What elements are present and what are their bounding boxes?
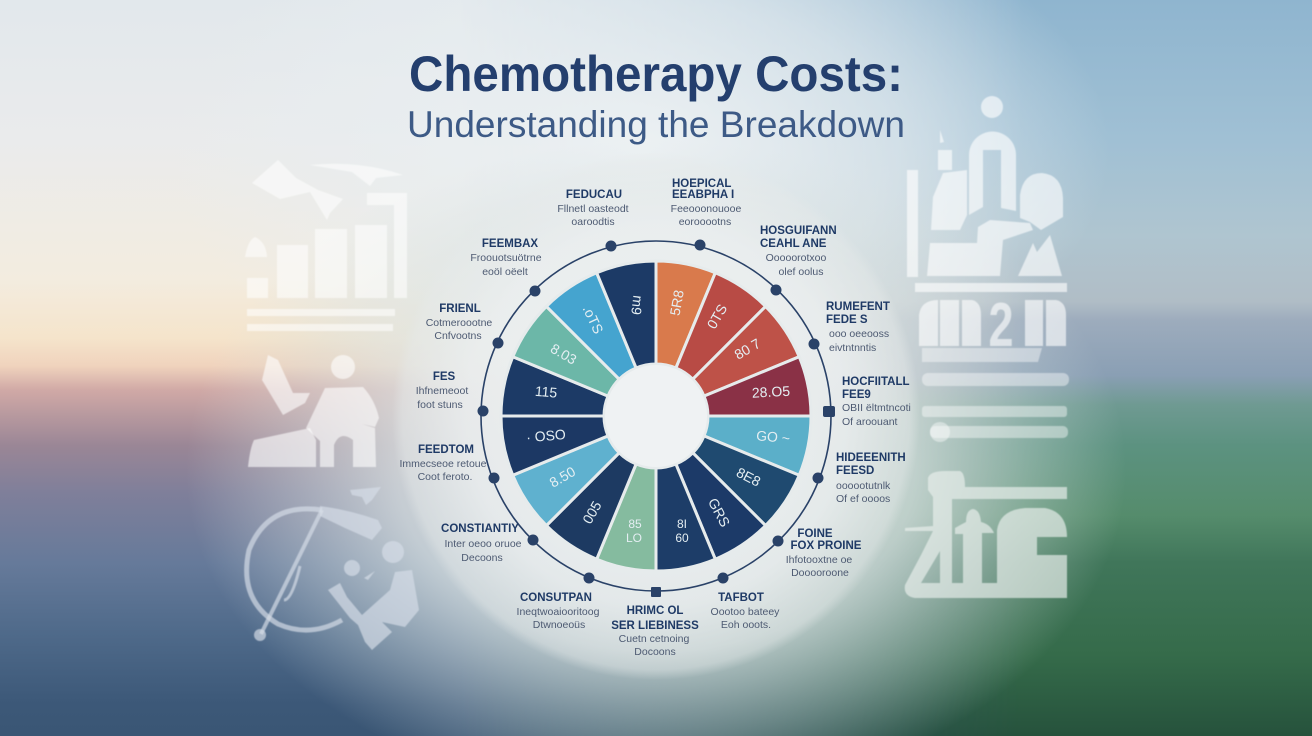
outer ring — [481, 241, 831, 591]
chart: cost wheel — [478, 240, 835, 597]
labels around the wheel — [400, 178, 911, 658]
label HOSGUIFANN: Ooooorotxoo — [766, 252, 827, 264]
segment 2 red — [676, 273, 766, 379]
label RUMEFENT: ooo oeeooss — [829, 328, 889, 340]
label HRIMC OL: Docoons — [634, 646, 676, 658]
label HIDEEENITH: HIDEEENITH — [836, 452, 906, 464]
label TAFBOT: Eoh ooots. — [721, 619, 771, 631]
label RUMEFENT: eivtntnntis — [829, 342, 876, 354]
value navy 115: 115 — [534, 383, 558, 401]
label HRIMC OL: HRIMC OL — [627, 605, 683, 617]
label CONSUTPAN — [517, 592, 600, 631]
label FRIENL: Cnfvootns — [434, 330, 482, 342]
label FRIENL — [426, 303, 492, 342]
label HOEPICAL — [671, 178, 741, 228]
icon: tiles with numeral: 2 — [988, 291, 1014, 360]
value navy 050: · OSO — [525, 426, 566, 445]
value deep blue: 8E8 — [734, 464, 764, 490]
label HOSGUIFANN — [760, 225, 837, 278]
label CONSTIANTIY: CONSTIANTIY — [441, 523, 519, 535]
label FOINE: FOINE — [797, 528, 833, 540]
label TAFBOT — [711, 592, 780, 631]
label FEEMBAX: FEEMBAX — [482, 238, 538, 250]
label FEEDTOM: FEEDTOM — [418, 444, 474, 456]
label CONSTIANTIY: Decoons — [461, 552, 503, 564]
label FES: FES — [433, 371, 456, 383]
label HIDEEENITH: Of ef oooos — [836, 493, 890, 505]
icon: flask and equipment — [905, 471, 1067, 598]
label HOCFIITALL: OBII ëltmtncoti — [842, 402, 911, 414]
label CONSUTPAN: Ineqtwoaiooritoog — [517, 606, 600, 618]
label HOEPICAL: eorooootns — [679, 216, 731, 228]
icon: hospital figures — [907, 96, 1067, 292]
icon group: right column silhouettes — [905, 96, 1069, 598]
segment 5 light blue — [704, 416, 811, 475]
value navy 005: 005 — [579, 498, 605, 526]
value green lower: LO — [626, 531, 642, 545]
label FEEDTOM — [400, 444, 487, 483]
label TAFBOT: TAFBOT — [718, 592, 764, 604]
label HIDEEENITH: oooootutnlk — [836, 480, 891, 492]
label HRIMC OL: Cuetn cetnoing — [619, 633, 689, 645]
label FOINE: FOX PROINE — [791, 540, 862, 552]
value teal: 8.03 — [548, 340, 580, 368]
label HOSGUIFANN: HOSGUIFANN — [760, 225, 837, 237]
label HRIMC OL — [611, 605, 699, 658]
label FRIENL: FRIENL — [439, 303, 481, 315]
segments — [501, 261, 811, 571]
value dark red: 28.O5 — [751, 383, 791, 401]
label HIDEEENITH — [836, 452, 906, 505]
label HRIMC OL: SER LIEBINESS — [611, 620, 699, 632]
label FOINE — [786, 528, 862, 579]
heading line 2: Understanding the Breakdown — [407, 104, 905, 145]
label FEDUCAU — [557, 189, 629, 228]
label CONSTIANTIY: Inter oeoo oruoe — [444, 538, 522, 550]
label FEDUCAU: Fllnetl oasteodt — [557, 203, 629, 215]
label FEEMBAX: eoöl oëelt — [482, 266, 528, 278]
centre hub — [605, 365, 707, 467]
label FEEMBAX: Froouotsuötrne — [470, 252, 542, 264]
label CONSUTPAN: Dtwnoeoüs — [533, 619, 585, 631]
label RUMEFENT: RUMEFENT — [826, 301, 890, 313]
label FEEDTOM: Immecseoe retoue — [400, 458, 487, 470]
icon: bar chart with mountain — [245, 160, 407, 331]
label TAFBOT: Oootoo bateey — [711, 606, 780, 618]
segment 16 navy — [597, 261, 656, 368]
label FEDUCAU: oaroodtis — [571, 216, 615, 228]
icon: circular tool with figure — [247, 487, 419, 650]
label HOEPICAL: EEABPHA I — [672, 189, 734, 201]
label RUMEFENT: FEDE S — [826, 314, 868, 326]
segment 6 deep blue — [693, 436, 799, 526]
label FES: foot stuns — [417, 399, 463, 411]
segment 10 navy — [546, 453, 636, 559]
segment 3 red — [693, 306, 799, 396]
ring markers — [478, 240, 835, 597]
segment 4 dark red — [704, 357, 811, 416]
label HOCFIITALL: FEE9 — [842, 389, 871, 401]
label CONSUTPAN: CONSUTPAN — [520, 592, 592, 604]
value light blue: GO ~ — [756, 427, 791, 446]
label HOEPICAL: HOEPICAL — [672, 178, 731, 190]
segment 11 blue — [513, 436, 619, 526]
value navy stacked: 8I — [677, 517, 687, 531]
halo disc behind the wheel — [392, 152, 920, 680]
segment 14 teal — [513, 306, 619, 396]
label HOSGUIFANN: CEAHL ANE — [760, 238, 827, 250]
label HOEPICAL: Feeooonouooe — [671, 203, 741, 215]
value navy: GRS — [705, 495, 733, 530]
value orange: 5R8 — [667, 289, 687, 317]
value red: 0TS — [704, 301, 730, 331]
title — [407, 46, 905, 145]
segment 15 blue — [546, 273, 636, 379]
segment 7 navy — [676, 453, 766, 559]
label HOCFIITALL: HOCFIITALL — [842, 376, 910, 388]
label FEDUCAU: FEDUCAU — [566, 189, 622, 201]
segment 12 navy — [501, 416, 608, 475]
segment 8 navy — [656, 464, 715, 571]
value blue: .oTS — [580, 303, 607, 336]
icon group: left column silhouettes — [245, 160, 419, 650]
label HOSGUIFANN: olef oolus — [779, 266, 823, 278]
icon: tiles with numeral — [919, 291, 1066, 360]
label CONSTIANTIY — [441, 523, 522, 564]
segment 13 navy — [501, 357, 608, 416]
label FEEMBAX — [470, 238, 542, 278]
segment 9 green — [597, 464, 656, 571]
icon: horizontal bars — [922, 348, 1069, 442]
icon: seated person with raised hand — [248, 355, 379, 467]
value navy top: m9 — [628, 295, 646, 316]
label FOINE: Ihfotooxtne oe — [786, 554, 852, 566]
segment 1 orange — [656, 261, 715, 368]
segment values — [525, 289, 791, 545]
label FES — [416, 371, 468, 411]
label HOCFIITALL: Of aroouant — [842, 416, 898, 428]
label RUMEFENT — [826, 301, 890, 354]
value red 807: 80 7 — [732, 335, 763, 363]
label FRIENL: Cotmeroootne — [426, 317, 492, 329]
heading line 1: Chemotherapy Costs: — [409, 46, 903, 102]
label FOINE: Dooooroone — [791, 567, 849, 579]
label HOCFIITALL — [842, 376, 911, 428]
label HIDEEENITH: FEESD — [836, 465, 874, 477]
value green: 85 — [628, 517, 642, 531]
label FES: Ihfnemeoot — [416, 385, 468, 397]
label FEEDTOM: Coot feroto. — [418, 471, 472, 483]
value blue 850: 8.50 — [547, 463, 578, 491]
value navy stacked lower: 60 — [675, 531, 689, 545]
